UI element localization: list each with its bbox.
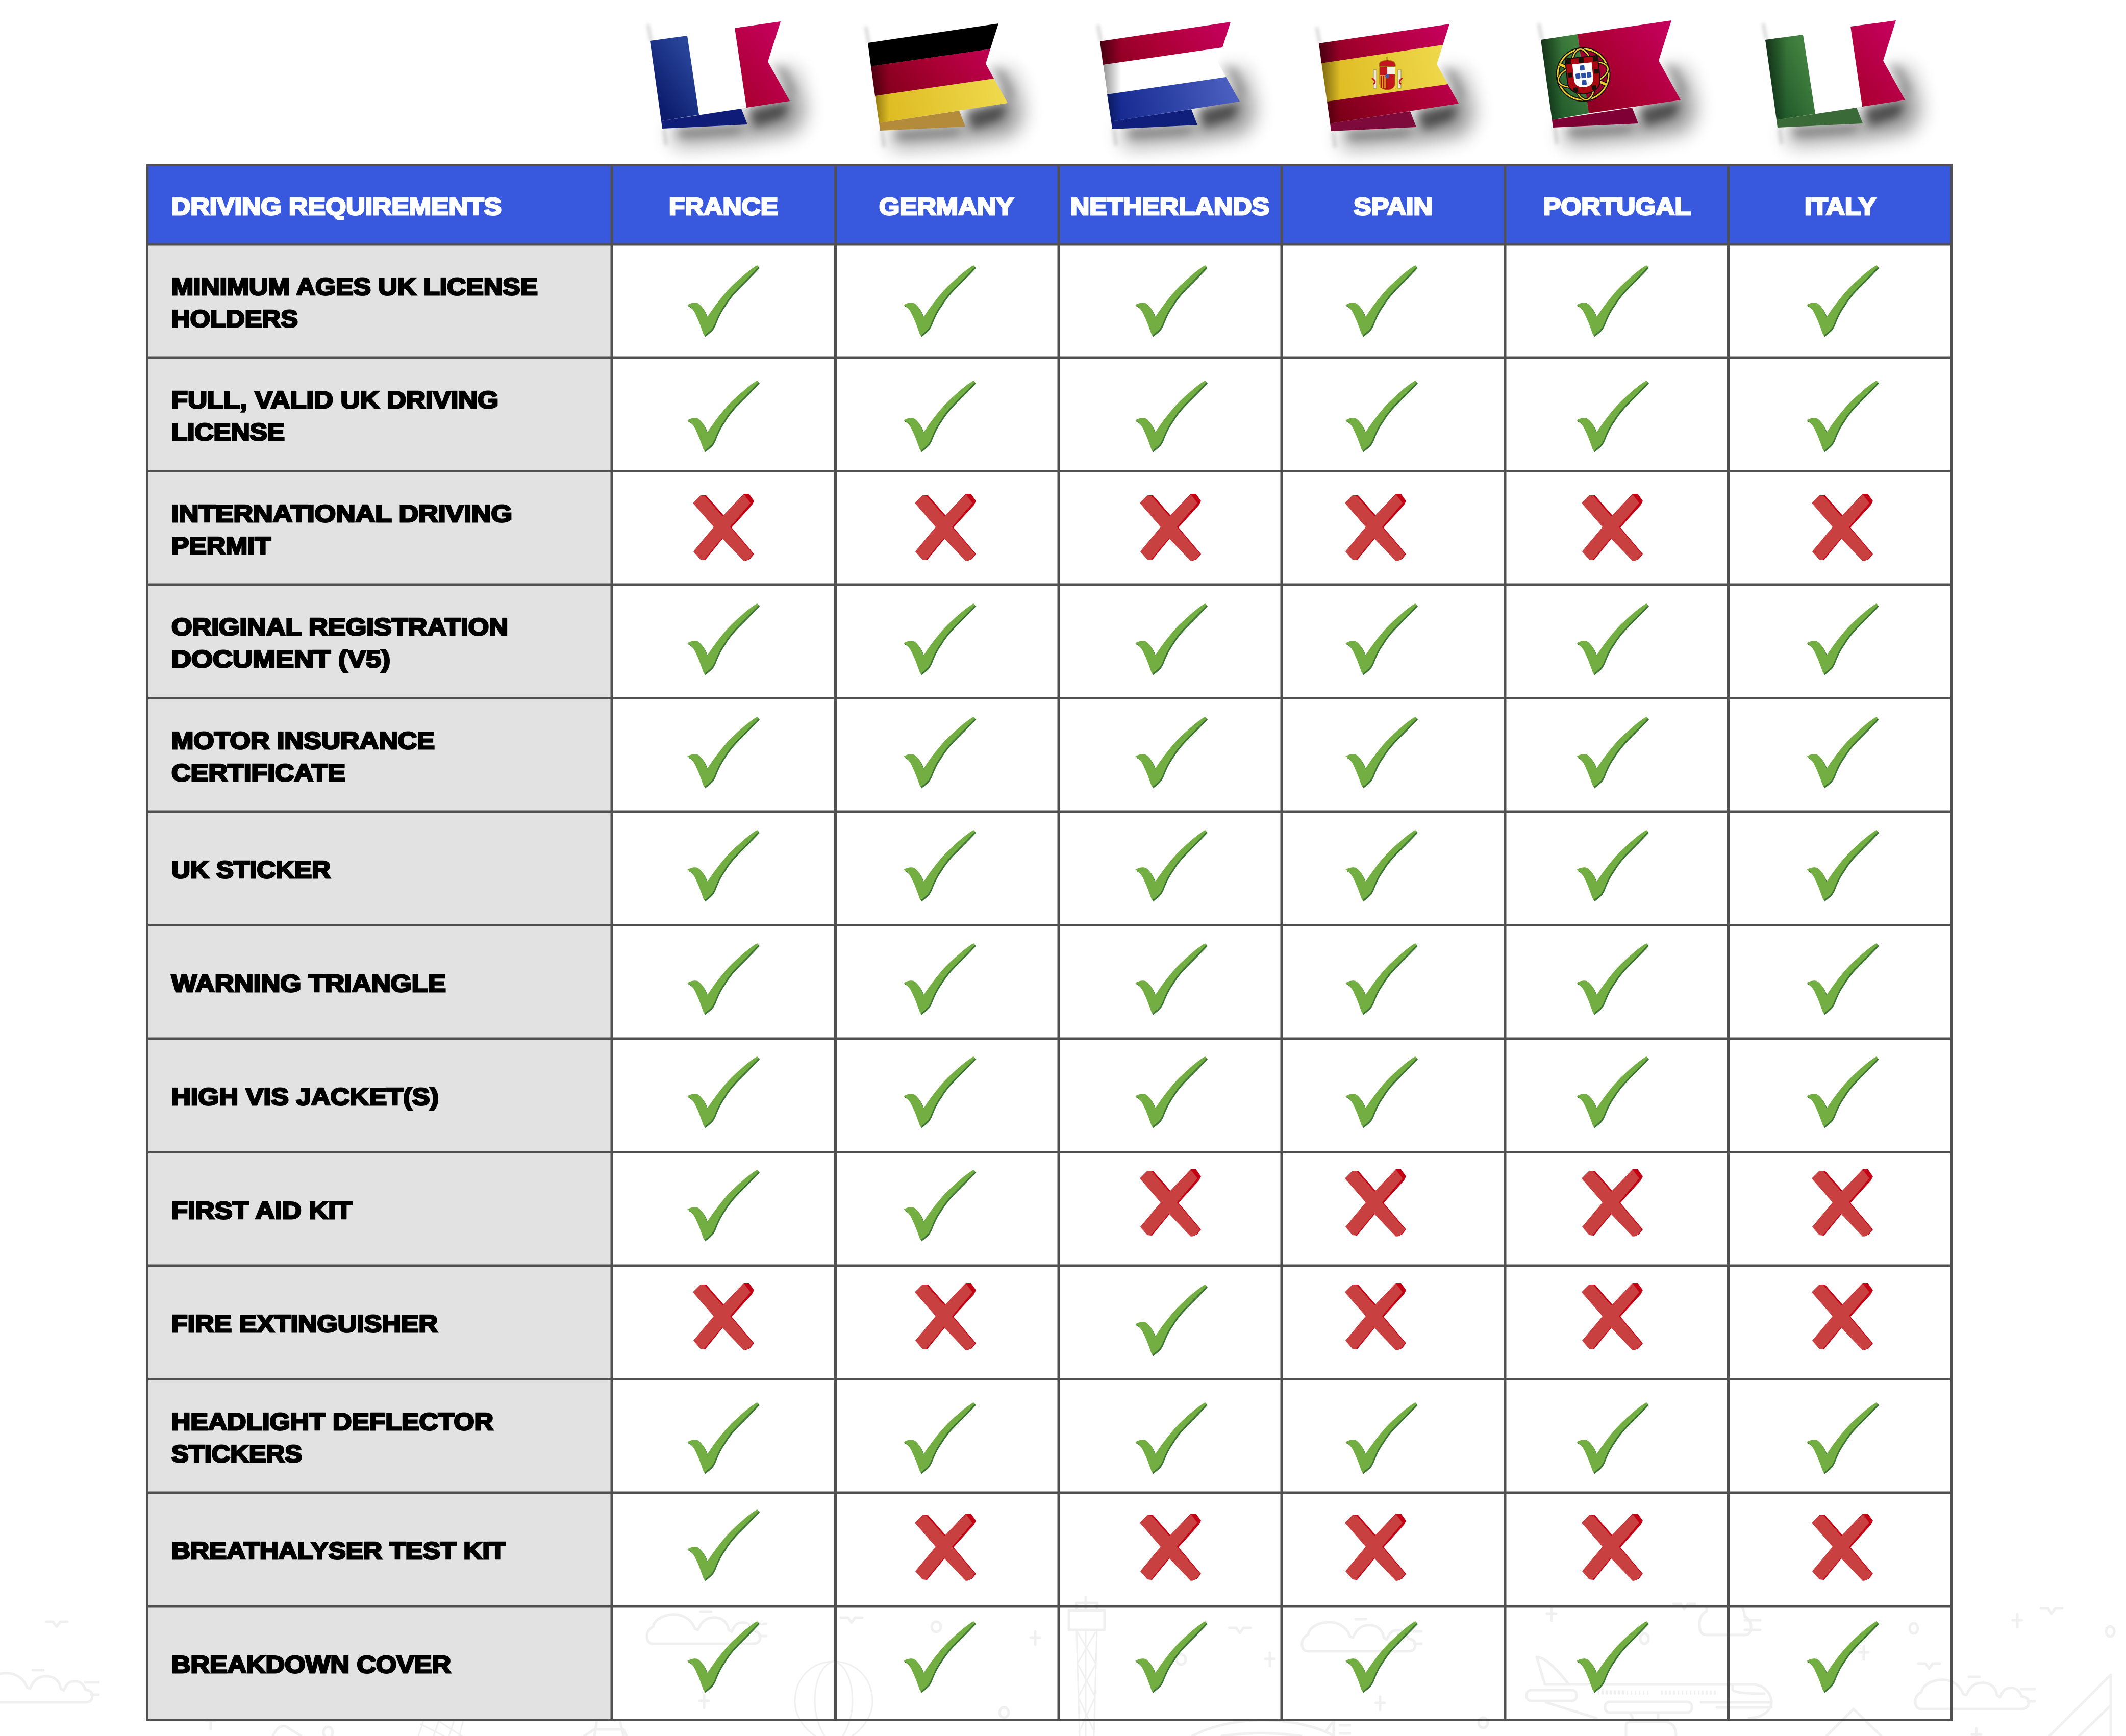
icons row 8: high vis xyxy=(687,1056,1879,1128)
row label: minimum ages: HOLDERS xyxy=(171,305,298,332)
icons row 6: UK sticker xyxy=(687,830,1879,902)
row label: full valid licence xyxy=(171,386,498,445)
icon: Portuguese coat of arms xyxy=(1556,47,1611,102)
row label: motor insurance: CERTIFICATE xyxy=(171,759,345,786)
icons row 4: registration document xyxy=(687,603,1879,675)
circle below Spain cell xyxy=(1479,1718,1488,1728)
icon: check Spain xyxy=(1345,830,1418,902)
icon: check Netherlands xyxy=(1135,1285,1208,1356)
icons row 2: full licence xyxy=(687,381,1879,452)
icons row 13: breakdown cover xyxy=(687,1621,1879,1693)
plus: France cell xyxy=(699,1695,709,1708)
icon: check Spain xyxy=(1345,1402,1418,1474)
icon: check France xyxy=(687,1509,760,1581)
icon: check Netherlands xyxy=(1135,1056,1208,1128)
icon: check France xyxy=(687,717,760,789)
radio tower xyxy=(1069,1597,1105,1736)
icon: check France xyxy=(687,1170,760,1242)
icon: check Italy xyxy=(1807,830,1879,902)
circle: Germany cell lower xyxy=(999,1707,1009,1718)
cloud: far left xyxy=(0,1670,98,1702)
background: faint travel illustrations xyxy=(0,1597,2114,1736)
icon: check Italy xyxy=(1807,943,1879,1015)
plus: Portugal cell xyxy=(1547,1607,1556,1621)
heading: Germany: GERMANY xyxy=(879,193,1014,220)
heading: driving requirements: DRIVING REQUIREMENTS xyxy=(171,193,502,220)
icons row 5: insurance xyxy=(687,717,1879,789)
row label: minimum ages xyxy=(171,273,538,332)
icon: check France xyxy=(687,943,760,1015)
row label: motor insurance xyxy=(171,727,435,786)
heading: Spain: SPAIN xyxy=(1354,193,1433,220)
icon: check France xyxy=(687,1056,760,1128)
plus and small shapes below first column xyxy=(206,1721,301,1736)
net shape below first column xyxy=(418,1721,463,1736)
icons row 3: international permit xyxy=(693,494,1873,561)
icon: check France xyxy=(687,265,760,337)
row label: registration document: ORIGINAL REGISTRATION xyxy=(171,613,508,640)
flag: Italy xyxy=(1762,20,1921,144)
icon: check France xyxy=(687,1621,760,1693)
flag: Portugal xyxy=(1537,20,1696,144)
icons row 11: headlight deflector xyxy=(687,1402,1879,1474)
icon: check Italy xyxy=(1807,1056,1879,1128)
heading: Netherlands: NETHERLANDS xyxy=(1070,193,1269,220)
row label: breathalyser: BREATHALYSER TEST KIT xyxy=(171,1537,506,1564)
icon: cross Spain xyxy=(1345,1283,1406,1350)
row label: registration document xyxy=(171,613,508,672)
icon: check Spain xyxy=(1345,381,1418,452)
bird: Portugal cell xyxy=(1673,1604,1695,1609)
icon: cross Portugal xyxy=(1582,1283,1643,1350)
tower base below first column xyxy=(584,1721,627,1736)
icon: check Spain xyxy=(1345,265,1418,337)
icon: check Italy xyxy=(1807,381,1879,452)
bird: upper right xyxy=(2041,1608,2062,1614)
icon: check Germany xyxy=(904,1621,976,1693)
row label: breakdown cover: BREAKDOWN COVER xyxy=(171,1651,451,1678)
circle: upper right xyxy=(2106,1626,2114,1637)
cloud: Portugal-Italy boundary xyxy=(1699,1607,1760,1635)
icon: cross Spain xyxy=(1345,494,1406,561)
cloud: right of table xyxy=(1915,1677,2035,1709)
icon: cross Portugal xyxy=(1582,494,1643,561)
icon: cross Netherlands xyxy=(1140,1514,1201,1581)
plus: Germany cell xyxy=(1031,1631,1040,1645)
icon: check France xyxy=(687,603,760,675)
row label: international permit: INTERNATIONAL DRIVING xyxy=(171,500,512,527)
icon: check Germany xyxy=(904,830,976,902)
icon: check Germany xyxy=(904,603,976,675)
icon: cross Italy xyxy=(1812,494,1873,561)
icon: check Netherlands xyxy=(1135,943,1208,1015)
icon: check Germany xyxy=(904,265,976,337)
row label: high vis: HIGH VIS JACKET(S) xyxy=(171,1083,439,1110)
icon: check Netherlands xyxy=(1135,830,1208,902)
icon: check Germany xyxy=(904,1402,976,1474)
icon: check Netherlands xyxy=(1135,265,1208,337)
bird: far left xyxy=(46,1622,67,1627)
table header background xyxy=(147,165,1952,244)
icon: cross Spain xyxy=(1345,1514,1406,1581)
circle: Italy cell xyxy=(1910,1623,1918,1633)
flag: Spain xyxy=(1315,24,1474,148)
icon: check Germany xyxy=(904,1056,976,1128)
icons row 9: first aid kit xyxy=(687,1169,1873,1242)
icon: cross Italy xyxy=(1812,1514,1873,1581)
icon: cross Germany xyxy=(915,1283,976,1350)
icon: check Portugal xyxy=(1577,1621,1649,1693)
icon: check Portugal xyxy=(1577,265,1649,337)
plus: Spain cell xyxy=(1375,1697,1385,1710)
hot air balloon xyxy=(795,1662,872,1736)
icon: check Spain xyxy=(1345,1056,1418,1128)
icon: cross Portugal xyxy=(1582,1169,1643,1237)
row label: headlight deflector: HEADLIGHT DEFLECTOR xyxy=(171,1408,493,1435)
first column background xyxy=(147,244,612,1720)
icon: cross France xyxy=(693,494,754,561)
bird: Netherlands cell xyxy=(1229,1628,1250,1633)
icon: cross Germany xyxy=(915,494,976,561)
icon: check Portugal xyxy=(1577,717,1649,789)
icon: check Spain xyxy=(1345,1621,1418,1693)
icon: check Italy xyxy=(1807,1621,1879,1693)
heading: column headers xyxy=(171,193,1876,220)
row label: international permit xyxy=(171,500,512,559)
icon: check Germany xyxy=(904,381,976,452)
icon: cross Spain xyxy=(1345,1169,1406,1237)
row label: fire extinguisher: FIRE EXTINGUISHER xyxy=(171,1310,438,1337)
icon: cross Italy xyxy=(1812,1169,1873,1237)
icon: check Italy xyxy=(1807,603,1879,675)
ferris arcs below Spain cell xyxy=(1192,1720,1350,1736)
icon: check Germany xyxy=(904,1170,976,1242)
panel: requirements table xyxy=(146,164,1953,1721)
row label: full valid licence: FULL, VALID UK DRIVING xyxy=(171,386,498,413)
circle below first column xyxy=(323,1727,333,1736)
icon: check Netherlands xyxy=(1135,603,1208,675)
icon: check Netherlands xyxy=(1135,1621,1208,1693)
icon: check Germany xyxy=(904,717,976,789)
icon: cross Portugal xyxy=(1582,1514,1643,1581)
row label: first aid kit: FIRST AID KIT xyxy=(171,1197,352,1224)
circle: Germany cell xyxy=(932,1622,941,1632)
icon: check France xyxy=(687,830,760,902)
bird: Italy cell xyxy=(1918,1664,1940,1669)
icon: check Portugal xyxy=(1577,603,1649,675)
row label: full valid licence: LICENSE xyxy=(171,418,285,445)
circle: Netherlands cell xyxy=(1177,1654,1186,1665)
cloud: Spain cell xyxy=(1302,1619,1421,1651)
row label: motor insurance: MOTOR INSURANCE xyxy=(171,727,435,754)
icon: check Spain xyxy=(1345,603,1418,675)
row label: warning triangle: WARNING TRIANGLE xyxy=(171,970,446,997)
icon: check Netherlands xyxy=(1135,381,1208,452)
icon: check Portugal xyxy=(1577,1402,1649,1474)
icon: check Netherlands xyxy=(1135,1402,1208,1474)
flag: France xyxy=(646,21,806,145)
plus: Italy cell xyxy=(1859,1646,1868,1659)
icon: check Portugal xyxy=(1577,830,1649,902)
plus: below right xyxy=(1972,1728,1981,1736)
icons row 7: warning triangle xyxy=(687,943,1879,1015)
cloud: France cell xyxy=(647,1612,766,1644)
heading: Portugal: PORTUGAL xyxy=(1543,193,1691,220)
icon: cross Italy xyxy=(1812,1283,1873,1350)
icon: check Germany xyxy=(904,943,976,1015)
row label: headlight deflector xyxy=(171,1408,493,1467)
plus: upper right xyxy=(2013,1614,2022,1627)
airplane xyxy=(1527,1657,1771,1736)
icon: check Portugal xyxy=(1577,943,1649,1015)
bird: Germany cell xyxy=(841,1618,862,1623)
mountain triangles right xyxy=(2049,1675,2111,1736)
plus: Netherlands cell xyxy=(1265,1653,1274,1666)
row label: headlight deflector: STICKERS xyxy=(171,1440,302,1467)
icon: check Italy xyxy=(1807,1402,1879,1474)
icon: cross Netherlands xyxy=(1140,1169,1201,1237)
icon: check Spain xyxy=(1345,717,1418,789)
row label: international permit: PERMIT xyxy=(171,532,271,559)
icon: cross Germany xyxy=(915,1514,976,1581)
flag: Germany xyxy=(864,23,1023,147)
icon: Spanish coat of arms xyxy=(1372,57,1403,90)
row label: registration document: DOCUMENT (V5) xyxy=(171,645,390,672)
circle: Portugal cell xyxy=(1640,1633,1648,1644)
heading: Italy: ITALY xyxy=(1805,193,1876,220)
tent shape below Italy cell xyxy=(1827,1709,1881,1736)
icon: cross Netherlands xyxy=(1140,494,1201,561)
icon: check Italy xyxy=(1807,265,1879,337)
icon: cross France xyxy=(693,1283,754,1350)
icons row 10: fire extinguisher xyxy=(693,1283,1873,1356)
icon: check Portugal xyxy=(1577,381,1649,452)
icon: check Italy xyxy=(1807,717,1879,789)
flag: Netherlands xyxy=(1096,22,1256,146)
icon: check Portugal xyxy=(1577,1056,1649,1128)
icon: check France xyxy=(687,1402,760,1474)
icons row 12: breathalyser xyxy=(687,1509,1873,1581)
row label: UK sticker: UK STICKER xyxy=(171,856,331,883)
icon: check Spain xyxy=(1345,943,1418,1015)
row label: minimum ages: MINIMUM AGES UK LICENSE xyxy=(171,273,538,300)
icons row 1: minimum ages xyxy=(687,265,1879,337)
heading: France: FRANCE xyxy=(669,193,778,220)
icon: check Netherlands xyxy=(1135,717,1208,789)
icon: check France xyxy=(687,381,760,452)
